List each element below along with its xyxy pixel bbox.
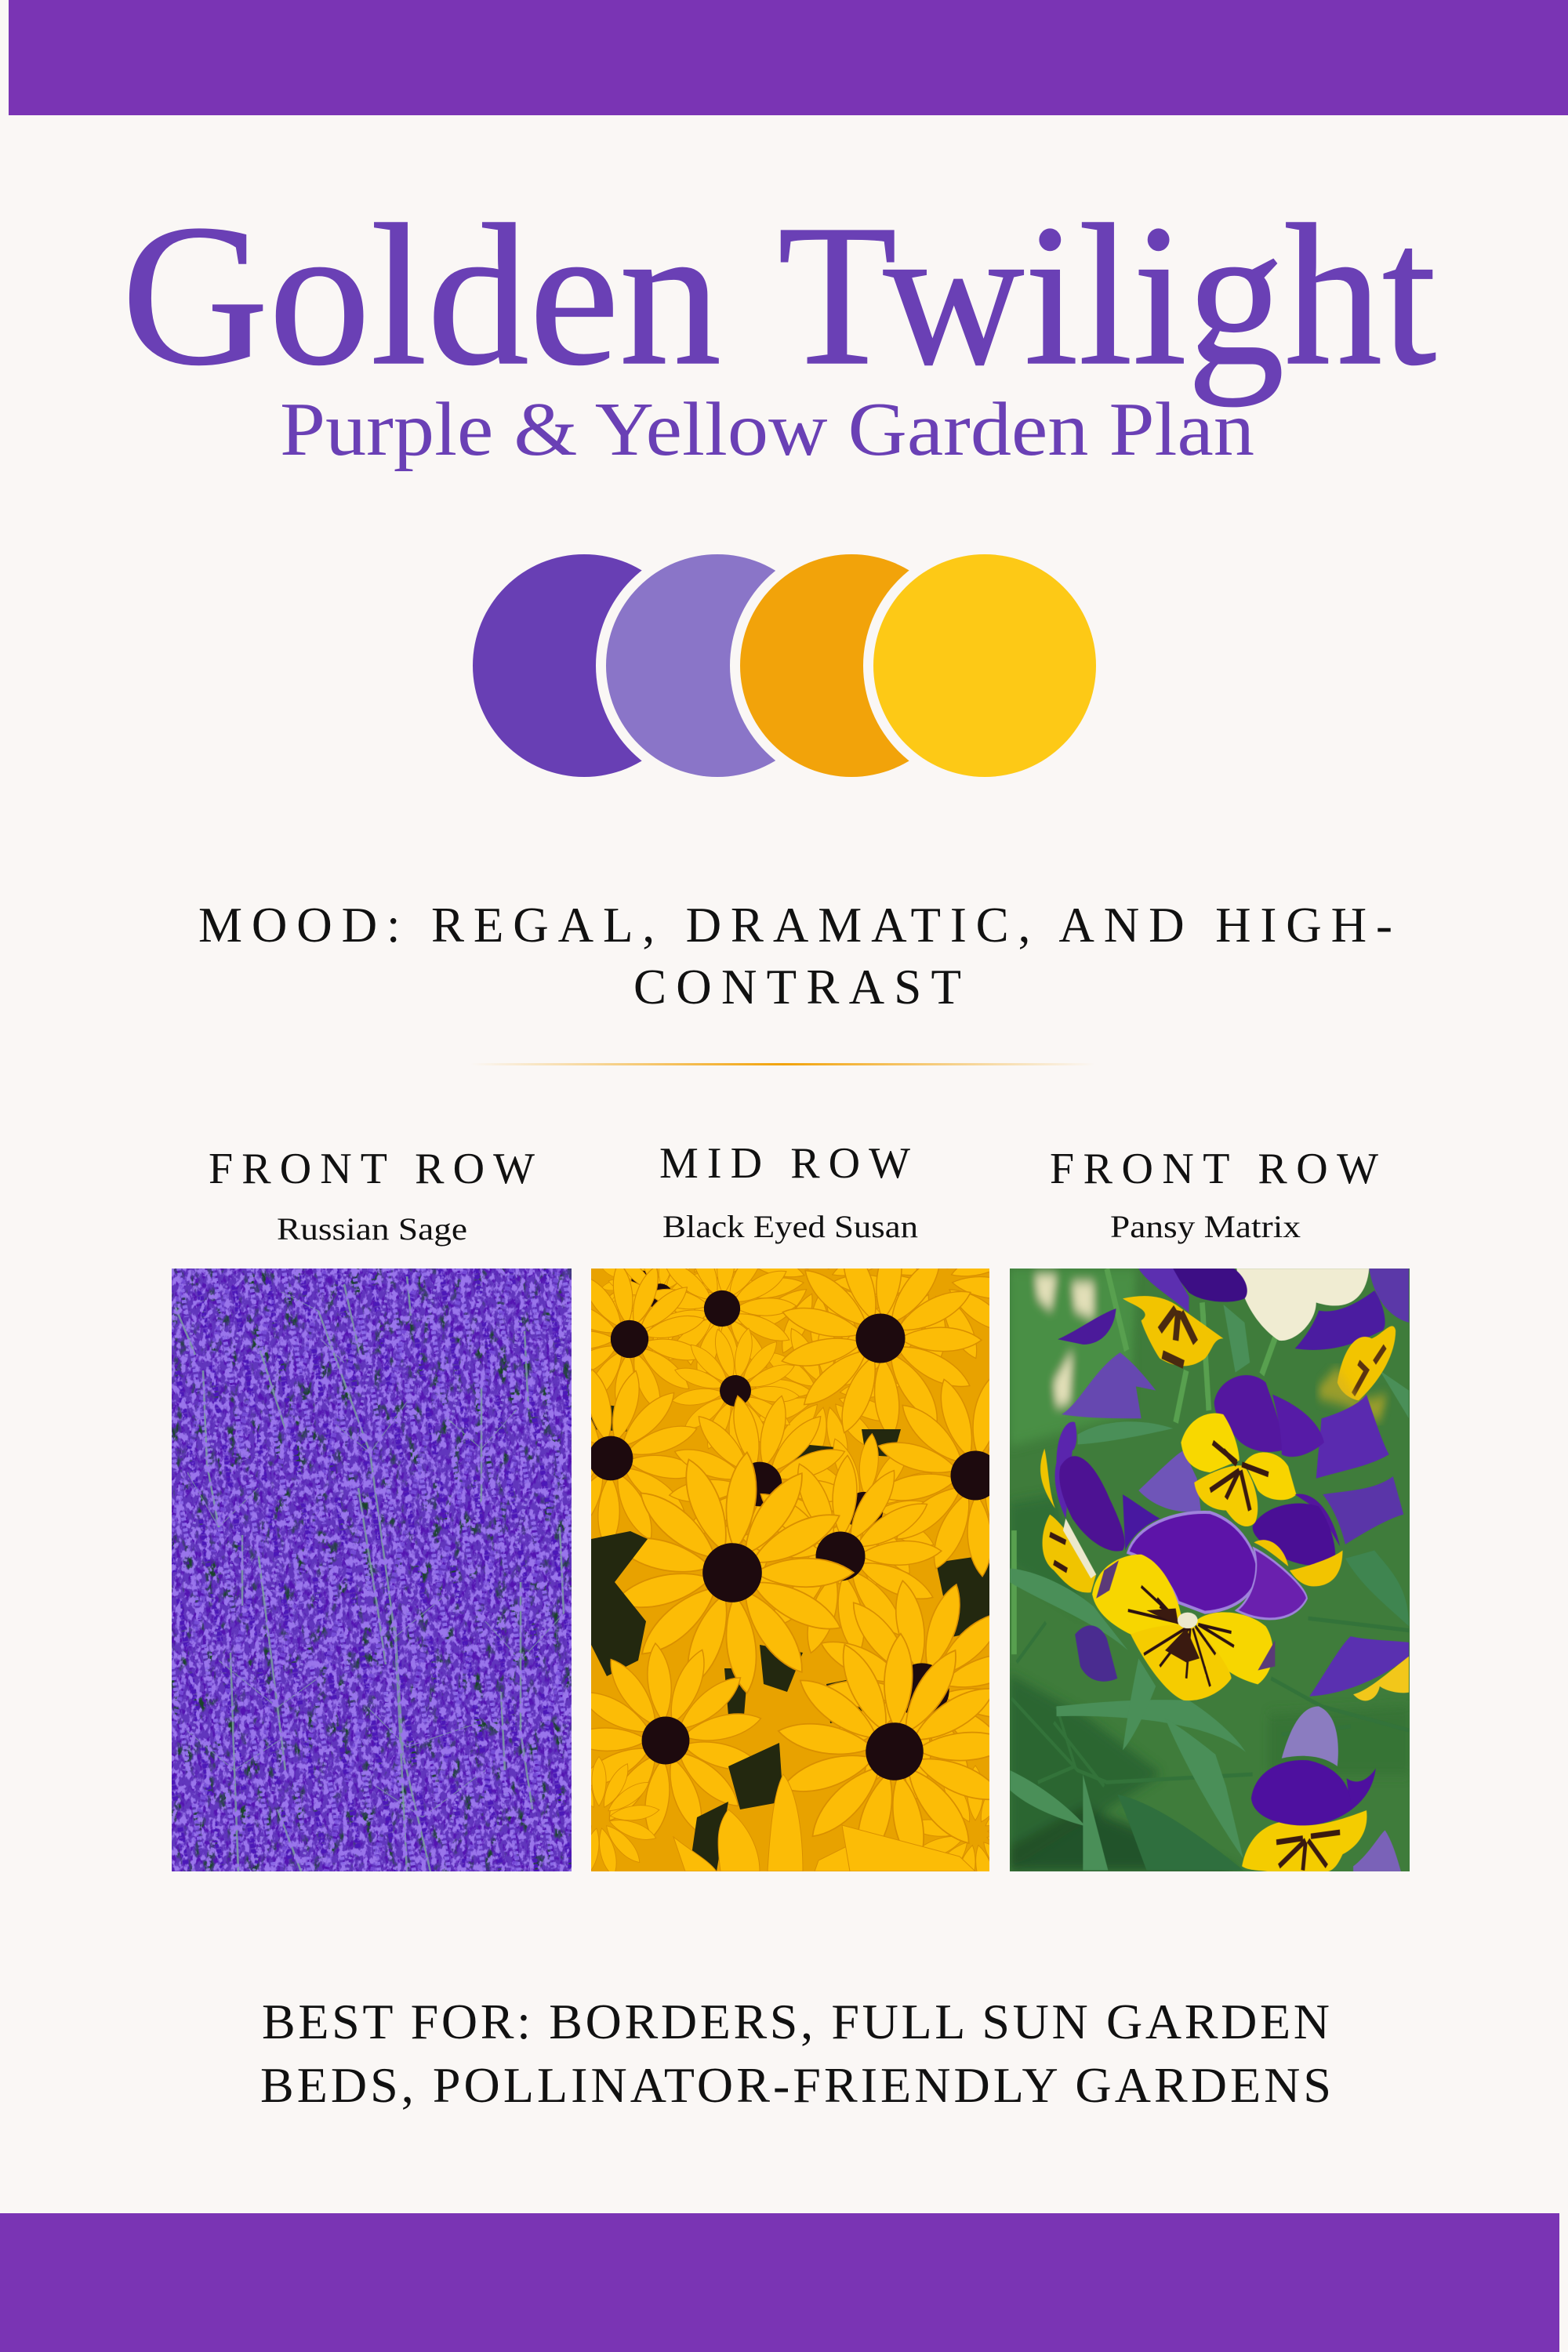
markings — [1276, 1832, 1340, 1871]
dark foliage gaps upper — [591, 1403, 989, 1723]
mood line two: CONTRAST — [633, 960, 961, 1014]
small pansy markings — [1353, 1346, 1385, 1395]
yellow left petal — [1092, 1555, 1181, 1635]
stems — [1014, 1269, 1292, 1654]
lavender behind — [1353, 1831, 1401, 1871]
back purple — [1055, 1422, 1076, 1519]
column two heading: mid row: MID ROW — [659, 1139, 910, 1188]
dark markings — [1160, 1308, 1196, 1364]
markings — [1050, 1534, 1067, 1570]
faded purple bud lower left — [1075, 1625, 1117, 1682]
yellow bottom — [1194, 1465, 1258, 1526]
photo: russian sage — [172, 1269, 572, 1871]
flower front layer — [538, 1550, 1063, 1900]
colour palette circles — [473, 544, 1106, 787]
main purple — [1251, 1760, 1351, 1825]
title word: Golden: Golden — [122, 183, 721, 407]
main purple — [1059, 1456, 1125, 1552]
right bottom wedge — [1309, 1636, 1409, 1697]
swatch: deep purple — [473, 554, 695, 777]
yellow right — [1244, 1452, 1296, 1500]
swatch: orange gap ring — [730, 544, 973, 787]
pale lavender bud — [1282, 1706, 1338, 1766]
small yellow pansy top right — [1338, 1326, 1396, 1400]
top purple — [1214, 1375, 1282, 1452]
top pansy petals — [1123, 1269, 1247, 1366]
leaves — [1010, 1305, 1409, 1871]
foliage base — [1010, 1269, 1410, 1872]
mood statement — [198, 898, 1392, 1014]
flower back layer — [530, 1166, 1044, 1468]
narrow leaf blades — [1011, 1618, 1409, 1786]
blurred background foliage — [1010, 1269, 1409, 1871]
dark leaf — [1117, 1795, 1243, 1871]
far right purple petals — [1369, 1269, 1409, 1323]
upper purple petal — [1128, 1512, 1258, 1613]
title word: Twilight: Twilight — [778, 183, 1437, 407]
pale lavender petal — [1138, 1450, 1201, 1512]
dark foliage left — [591, 1531, 648, 1676]
swatch: yellow gap ring — [863, 544, 1106, 787]
right purple petal — [1236, 1548, 1307, 1619]
mood line one: MOOD: REGAL, DRAMATIC, AND HIGH- — [198, 898, 1392, 953]
violet upper petal — [1138, 1269, 1189, 1312]
top purple banner — [9, 0, 1568, 115]
golden petal ground — [591, 1269, 989, 1871]
right bottom yellow — [1353, 1657, 1409, 1700]
yellow bottom petal — [1131, 1624, 1232, 1700]
white throat — [1178, 1613, 1198, 1628]
swatch: orange — [740, 554, 963, 777]
photo: pansy matrix — [1010, 1269, 1410, 1871]
yellow right petal — [1194, 1612, 1273, 1684]
main purple — [1253, 1504, 1335, 1566]
best for line one: BEST FOR: BORDERS, FULL SUN GARDEN — [262, 1994, 1330, 2049]
background purple petal top right — [1295, 1290, 1385, 1350]
dark foliage bottom — [689, 1743, 783, 1871]
bright lavender wedge — [1316, 1395, 1389, 1479]
bottom purple banner — [0, 2213, 1559, 2352]
yellow lower petal — [1290, 1551, 1343, 1586]
yellow petals — [1242, 1810, 1367, 1871]
lavender wedge right — [1323, 1476, 1403, 1544]
purple tail — [1347, 1769, 1376, 1810]
photo: black eyed susan — [591, 1269, 989, 1871]
title — [122, 183, 1437, 407]
back purple — [1295, 1494, 1340, 1546]
yellow lower — [1043, 1515, 1096, 1592]
lavender wedge left — [1062, 1352, 1156, 1418]
subtitle: Purple & Yellow Garden Plan — [280, 387, 1254, 472]
swatch: yellow — [873, 554, 1096, 777]
purple petal tips — [1096, 1560, 1275, 1671]
pale throat — [1063, 1519, 1096, 1578]
left purple wedge — [1058, 1308, 1116, 1345]
yellow left — [1181, 1413, 1240, 1472]
yellow lower petal — [1123, 1296, 1223, 1366]
yellow sliver — [1040, 1449, 1055, 1508]
plant name: Russian Sage: Russian Sage — [277, 1211, 467, 1247]
dense marking core — [1146, 1609, 1200, 1662]
dark purple bud — [1123, 1494, 1160, 1551]
left pansy — [1040, 1422, 1125, 1592]
swatch: lavender gap ring — [596, 544, 839, 787]
yellow blur right — [1319, 1367, 1388, 1422]
bottom pansy — [1242, 1760, 1401, 1871]
bottom petals — [673, 1774, 975, 1871]
dark upper petal — [1171, 1269, 1247, 1302]
plant name: Pansy Matrix: Pansy Matrix — [1110, 1209, 1301, 1244]
right purple — [1272, 1395, 1324, 1457]
yellow left petal — [1254, 1540, 1288, 1566]
best for statement — [260, 1994, 1331, 2113]
dark rays — [1128, 1586, 1234, 1686]
gold divider — [470, 1063, 1095, 1065]
plant name: Black Eyed Susan: Black Eyed Susan — [662, 1209, 918, 1244]
flower middle layer — [498, 1345, 1093, 1708]
markings — [1210, 1443, 1269, 1511]
pale white pansy — [1236, 1269, 1369, 1341]
swatch: lavender — [606, 554, 829, 777]
column one heading: front row: FRONT ROW — [209, 1145, 535, 1193]
third pansy right — [1253, 1494, 1343, 1586]
main large pansy — [1092, 1512, 1307, 1700]
best for line two: BEDS, POLLINATOR-FRIENDLY GARDENS — [260, 2057, 1331, 2113]
column three heading: front row: FRONT ROW — [1050, 1145, 1378, 1193]
second pansy — [1181, 1375, 1324, 1526]
